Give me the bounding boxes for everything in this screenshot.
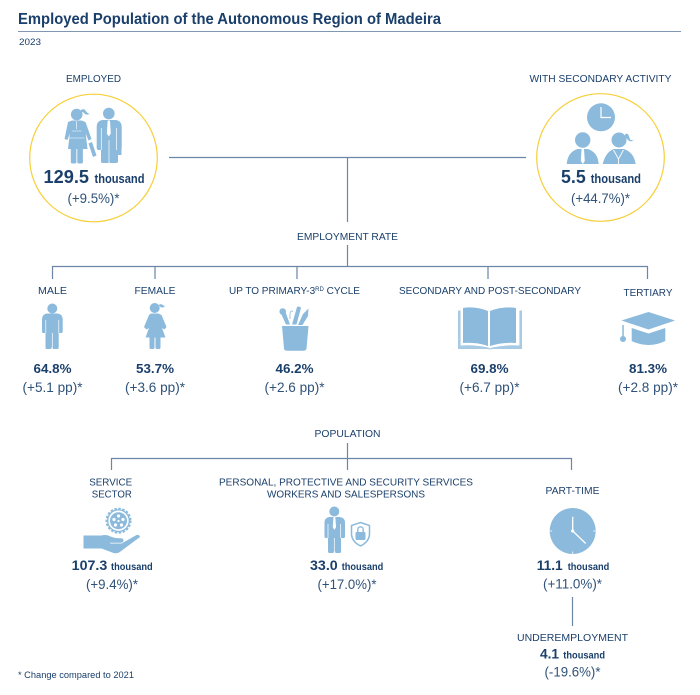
female rate: 53.7% [136,361,174,376]
part-time value [537,558,609,574]
icon: male figure [42,304,63,349]
title: Employed Population of the Autonomous Region of Madeira [18,11,441,28]
service sector value: 107.3 [72,558,107,574]
service sector change: (+9.4%)* [86,576,139,592]
employed ring [30,94,157,222]
service sector label [89,478,133,500]
service sector label: SERVICE [89,478,133,488]
panel: underemployment [517,633,628,680]
service sector value: thousand [111,561,153,573]
part-time value: 11.1 [537,558,563,574]
panel: secondary and post-secondary [399,286,581,395]
secondary activity change: (+44.7%)* [571,190,631,206]
employed change: (+9.5%)* [68,190,120,206]
panel: employed [30,74,157,222]
primary label: CYCLE [324,286,360,297]
panel: personal services workers [219,478,473,592]
secondary education rate: 69.8% [470,361,509,376]
tertiary label: TERTIARY [624,288,673,299]
icon: clock and two workers [567,103,636,164]
panel: service sector [72,478,153,592]
male label: MALE [38,286,67,297]
tertiary change: (+2.8 pp)* [618,379,679,395]
primary label: RD [315,287,325,293]
secondary education change: (+6.7 pp)* [460,379,520,395]
panel: secondary activity [530,74,672,221]
service sector label: SECTOR [92,490,132,500]
underemployment value [540,646,605,662]
year: 2023 [19,37,41,47]
panel: male [22,286,83,395]
female change: (+3.6 pp)* [125,379,186,395]
icon: hand with gear [84,509,140,553]
personal services value [310,558,383,574]
personal services label: PERSONAL, PROTECTIVE AND SECURITY SERVICES [219,478,473,488]
panel: up to primary [229,286,360,395]
icon: pencil cup [279,306,308,351]
panel: tertiary [618,288,679,395]
icon: graduation cap [620,312,675,345]
secondary activity ring [537,94,664,221]
footnote: * Change compared to 2021 [18,670,134,680]
panel: part-time [537,486,609,592]
secondary activity value: thousand [591,171,641,186]
employed value: thousand [94,171,145,186]
underemployment label: UNDEREMPLOYMENT [517,633,628,644]
icon: female figure [144,303,166,349]
employed value [44,167,145,187]
heading: employment rate: EMPLOYMENT RATE [297,232,398,243]
tertiary rate: 81.3% [629,361,667,376]
secondary activity label: WITH SECONDARY ACTIVITY [530,74,672,85]
underemployment value: 4.1 [540,646,559,662]
panel: female [125,286,186,395]
primary rate: 46.2% [276,361,314,376]
icon: clock [550,508,596,554]
employed label: EMPLOYED [66,74,121,85]
primary label: UP TO PRIMARY-3 [229,286,316,297]
personal services label: WORKERS AND SALESPERSONS [267,490,425,500]
service sector value [72,558,153,574]
icon: woman and man [64,108,122,164]
part-time change: (+11.0%)* [543,576,603,592]
underemployment change: (-19.6%)* [544,664,601,680]
male rate: 64.8% [34,361,72,376]
employed value: 129.5 [44,167,89,187]
secondary activity value [561,167,641,187]
personal services change: (+17.0%)* [318,576,377,592]
icon: worker with shield [324,506,370,553]
part-time label: PART-TIME [546,486,600,497]
secondary activity value: 5.5 [561,167,586,187]
male change: (+5.1 pp)* [22,379,83,395]
primary change: (+2.6 pp)* [264,379,325,395]
heading: population: POPULATION [314,429,380,440]
icon: open book [458,307,522,350]
personal services label [219,478,473,500]
underemployment value: thousand [563,650,605,662]
female label: FEMALE [134,286,176,297]
part-time value: thousand [568,561,609,573]
secondary education label: SECONDARY AND POST-SECONDARY [399,286,581,297]
personal services value: thousand [342,561,383,573]
personal services value: 33.0 [310,558,338,574]
